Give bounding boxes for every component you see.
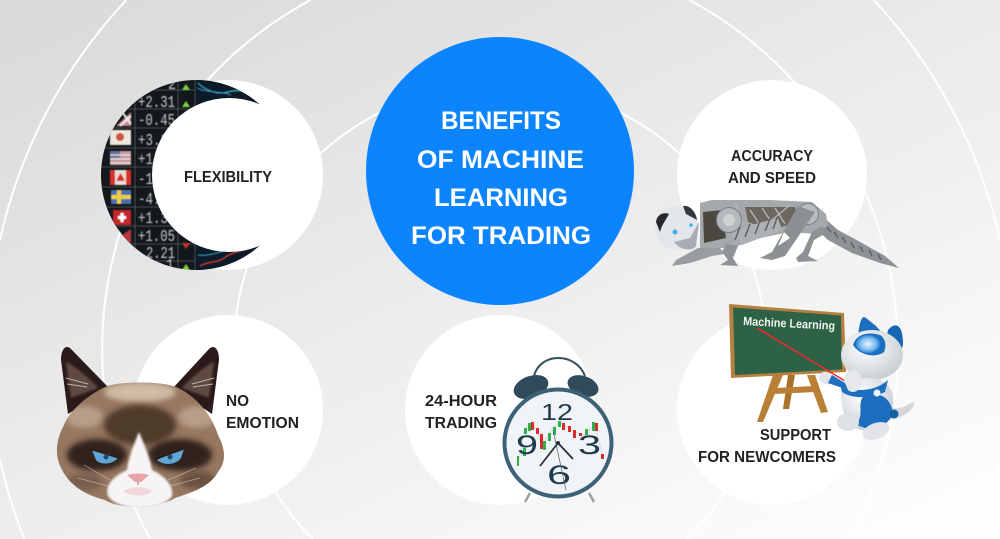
ticker board crescent image: 2.21 bbox=[146, 245, 175, 264]
title: LEARNING bbox=[434, 184, 568, 212]
icon: easel with chalkboard bbox=[729, 304, 846, 422]
ticker board crescent image: +1.3 bbox=[138, 210, 168, 229]
support label: SUPPORT bbox=[760, 427, 831, 444]
ticker board crescent image: 1 bbox=[166, 257, 174, 276]
accuracy label bbox=[728, 148, 816, 187]
clock numerals bbox=[516, 399, 601, 490]
support label bbox=[698, 427, 836, 466]
ticker board crescent image: 2 bbox=[168, 76, 176, 95]
flexibility label: FLEXIBILITY bbox=[184, 169, 272, 186]
title bbox=[411, 107, 591, 250]
panel: flexibility bbox=[100, 76, 323, 276]
icon: grumpy cat face bbox=[57, 347, 224, 508]
panel: support for newcomers bbox=[677, 304, 914, 505]
ticker board crescent image: +2.31 bbox=[138, 94, 175, 113]
ticker board crescent image bbox=[101, 80, 260, 270]
ticker board crescent image: -0.45 bbox=[138, 112, 175, 131]
clock numerals: 3 bbox=[578, 430, 601, 460]
panel: central title bbox=[366, 37, 634, 305]
panel: no emotion bbox=[57, 315, 323, 508]
ticker board crescent image: -4.1 bbox=[138, 191, 168, 210]
candlestick chart on clock face bbox=[517, 421, 604, 466]
icon: robot cat teacher bbox=[817, 317, 914, 443]
24-hour label: 24-HOUR bbox=[425, 393, 497, 410]
ticker board crescent image: +1.1 bbox=[138, 151, 168, 170]
icon: easel with chalkboard: Machine Learning bbox=[743, 314, 835, 333]
clock numerals: 12 bbox=[541, 399, 573, 425]
support white circle bbox=[677, 315, 867, 505]
no emotion label bbox=[226, 393, 299, 432]
title: OF MACHINE bbox=[417, 146, 584, 174]
title: BENEFITS bbox=[441, 107, 561, 135]
ticker board crescent image: +3.2 bbox=[138, 132, 168, 151]
24-hour white circle bbox=[405, 315, 595, 505]
no emotion label: NO bbox=[226, 393, 249, 410]
accuracy label: AND SPEED bbox=[728, 170, 816, 187]
ticker board crescent image: -1.2 bbox=[138, 171, 168, 190]
no emotion label: EMOTION bbox=[226, 415, 299, 432]
accuracy white circle bbox=[677, 80, 867, 270]
24-hour label bbox=[425, 393, 497, 432]
flexibility inner white circle bbox=[152, 98, 306, 252]
title: FOR TRADING bbox=[411, 222, 591, 250]
ticker board crescent image: +1.05 bbox=[138, 228, 175, 247]
clock numerals: 9 bbox=[516, 430, 538, 460]
flexibility white circle bbox=[133, 80, 323, 270]
accuracy label: ACCURACY bbox=[731, 148, 813, 165]
panel: 24-hour trading bbox=[405, 315, 612, 505]
central blue circle bbox=[366, 37, 634, 305]
panel: accuracy and speed bbox=[655, 80, 899, 270]
24-hour label: TRADING bbox=[425, 415, 497, 432]
icon: mechanical cat bbox=[655, 200, 899, 268]
no emotion white circle bbox=[133, 315, 323, 505]
clock numerals: 6 bbox=[547, 460, 571, 490]
support label: FOR NEWCOMERS bbox=[698, 449, 836, 466]
icon: alarm clock bbox=[504, 358, 612, 502]
